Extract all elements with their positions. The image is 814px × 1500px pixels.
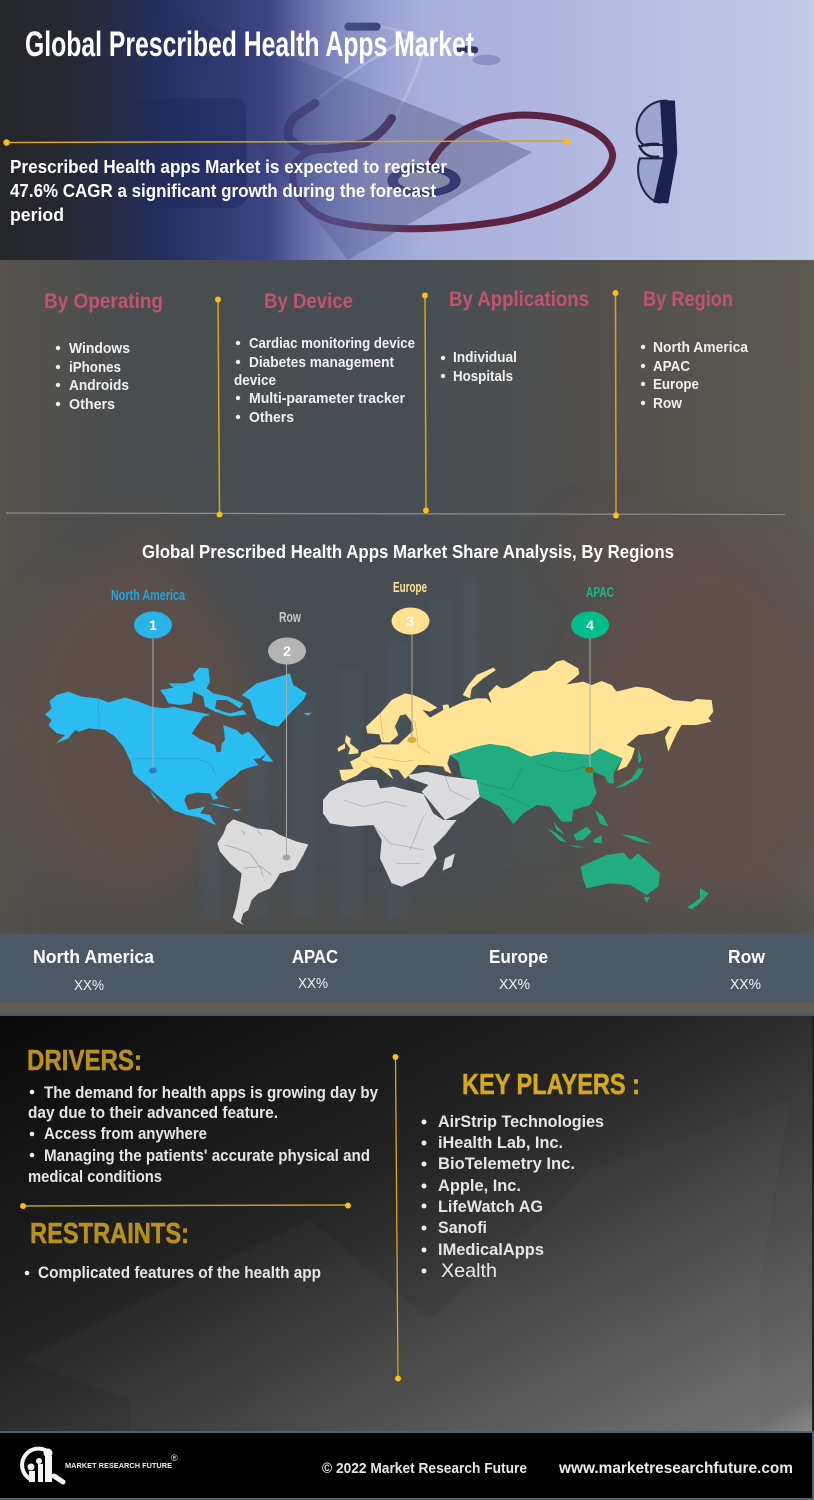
column: by applications (441, 288, 589, 385)
logo wordmark: MARKET RESEARCH FUTURE (65, 1463, 172, 1470)
text block: key players list (422, 1112, 604, 1282)
panel: market segmentation (6, 288, 785, 518)
icon: phone (135, 98, 246, 208)
column: by operating: Windows (69, 340, 130, 357)
divider with dots: header (3, 138, 570, 146)
panel: regional share strip (0, 934, 814, 1016)
column: by region: Europe (653, 376, 699, 393)
column: by device: device (234, 372, 276, 389)
text block: drivers list: medical conditions (28, 1167, 162, 1186)
map region: South America (217, 819, 308, 925)
text block: key players list: Apple, Inc. (438, 1176, 521, 1195)
map pin 2: Row: 2 (283, 643, 291, 659)
website: www.marketresearchfuture.com (558, 1460, 793, 1477)
text block: CAGR statement: period (10, 205, 64, 225)
map pin 2: Row (268, 609, 306, 860)
column: by device: Cardiac monitoring device (249, 335, 415, 352)
text block: key players list: iHealth Lab, Inc. (438, 1133, 563, 1152)
copyright: © 2022 Market Research Future (322, 1460, 527, 1477)
column: by region: By Region (643, 288, 733, 311)
heading: restraints: RESTRAINTS: (30, 1218, 189, 1250)
map pin 1: North America (111, 587, 185, 774)
text block: CAGR statement: Prescribed Health apps Market is expected to register (10, 157, 447, 177)
map pin 3: Europe: 3 (406, 613, 414, 629)
panel: regional share strip: XX% (730, 976, 761, 993)
text block: key players list: IMedicalApps (438, 1240, 544, 1259)
text block: drivers list: The demand for health apps is growing day by (44, 1083, 378, 1102)
text block: drivers list: Managing the patients' accurate physical and (44, 1146, 370, 1165)
map pin 4: APAC: 4 (586, 617, 594, 633)
column: by applications: By Applications (449, 288, 589, 311)
panel: regional share strip: XX% (499, 976, 530, 993)
divider with dots: drivers and restraints (20, 1202, 351, 1209)
divider: vertical (392, 1054, 401, 1382)
text block: key players list: Sanofi (438, 1218, 487, 1237)
column: by operating: iPhones (69, 359, 121, 376)
panel: regional share strip: Row (728, 947, 766, 967)
column: by operating: By Operating (44, 290, 163, 313)
map region: Asia Pacific (450, 744, 708, 909)
map pin 3: Europe: Europe (393, 579, 427, 596)
logo wordmark: ® (171, 1453, 178, 1463)
column: by region: APAC (653, 358, 690, 375)
panel: footer (0, 1431, 814, 1500)
text block: key players list: AirStrip Technologies (438, 1112, 604, 1131)
column: by device: Others (249, 409, 294, 426)
text block: CAGR statement: 47.6% CAGR a significant growth during the forecast (10, 181, 436, 201)
logo wordmark (65, 1453, 178, 1470)
column: by applications: Individual (453, 349, 517, 366)
map pin 1: North America: North America (111, 587, 185, 604)
map region: Europe and Russia (337, 660, 713, 781)
panel: segments and map background (0, 260, 814, 1016)
text block: key players list: Xealth (441, 1261, 497, 1282)
column: by operating: Others (69, 396, 115, 413)
panel: drivers, restraints, key players (0, 1016, 812, 1431)
panel: regional share strip: APAC (292, 947, 338, 967)
panel: regional share strip: XX% (298, 975, 328, 992)
column: by device: Multi-parameter tracker (249, 390, 405, 407)
map pin 1: North America: 1 (149, 617, 157, 633)
icon: stethoscope (288, 27, 613, 229)
column: by applications: Hospitals (453, 368, 513, 385)
icon: Market Research Future logo (22, 1448, 63, 1482)
panel: regional share strip: XX% (74, 977, 104, 994)
text block: CAGR statement (10, 157, 447, 225)
map pin 4: APAC: APAC (586, 584, 614, 601)
column: by operating (44, 290, 163, 413)
panel: regional share strip: Europe (489, 947, 548, 967)
column: by device: Diabetes management (249, 354, 394, 371)
column: by region (641, 288, 749, 412)
column: by device: By Device (264, 290, 353, 313)
text block: key players list: LifeWatch AG (438, 1197, 543, 1216)
column: by operating: Androids (69, 377, 129, 394)
text block: drivers list: day due to their advanced feature. (28, 1103, 278, 1122)
panel: header photo banner (0, 0, 814, 260)
heading: map section: Global Prescribed Health Apps Market Share Analysis, By Regions (142, 542, 674, 562)
text block: restraints list: Complicated features of the health app (38, 1263, 321, 1282)
map region: Africa and Middle East (323, 772, 480, 887)
map pin 2: Row: Row (279, 609, 301, 626)
heading: drivers: DRIVERS: (27, 1045, 142, 1077)
map pin 4: APAC (571, 584, 614, 773)
map pin 3: Europe (392, 579, 430, 743)
column: by region: Row (653, 395, 682, 412)
icon: glasses (637, 100, 677, 203)
text block: drivers list (28, 1083, 378, 1186)
world map (45, 660, 713, 925)
map region: North America (45, 668, 312, 825)
column: by device (234, 290, 415, 426)
column: by region: North America (653, 339, 749, 356)
text block: key players list: BioTelemetry Inc. (438, 1154, 575, 1173)
title: Global Prescribed Health Apps Market (25, 25, 474, 64)
panel: regional share strip: North America (33, 947, 155, 967)
text block: drivers list: Access from anywhere (44, 1124, 207, 1143)
heading: key players: KEY PLAYERS : (462, 1069, 640, 1101)
